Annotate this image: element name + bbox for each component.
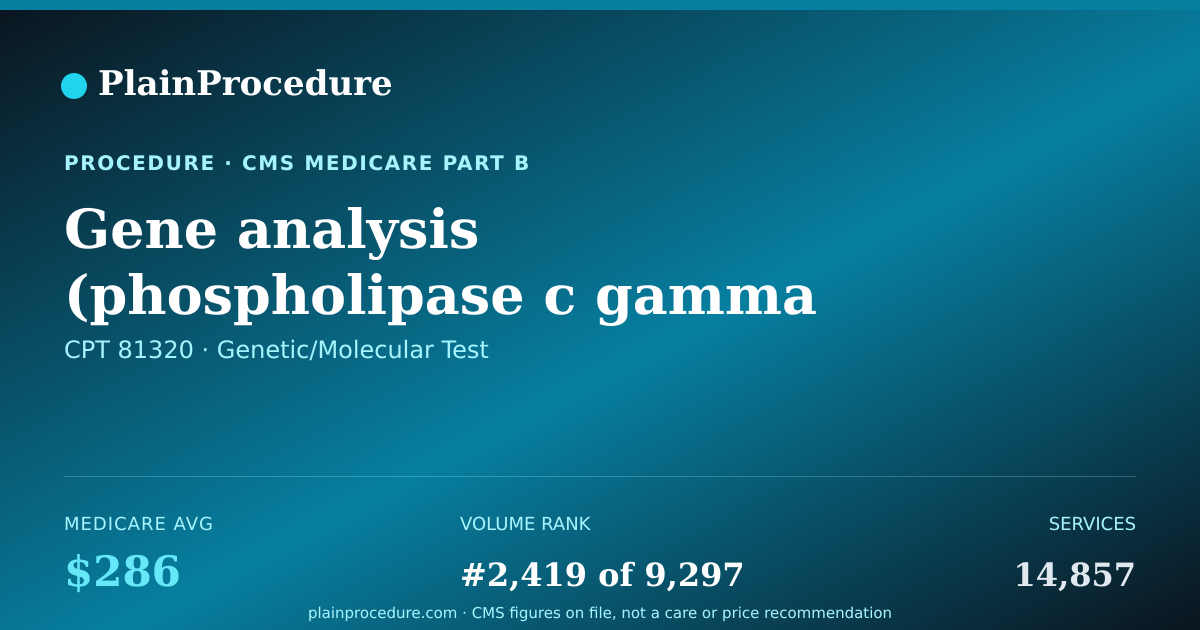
stat label: MEDICARE AVG — [64, 514, 214, 535]
stat: services — [1014, 514, 1136, 594]
stat: medicare average — [64, 514, 214, 596]
stat label: SERVICES — [1049, 514, 1136, 535]
title: (phospholipase c gamma — [64, 263, 817, 327]
stat: volume rank — [460, 514, 745, 594]
divider — [64, 476, 1136, 477]
top accent bar — [0, 0, 1200, 10]
footer note: plainprocedure.com · CMS figures on file, not a care or price recommendation — [308, 604, 892, 622]
title: Gene analysis — [64, 197, 479, 261]
stat value: #2,419 of 9,297 — [460, 556, 745, 594]
brand name: PlainProcedure — [98, 64, 393, 104]
stat value: $286 — [64, 547, 181, 596]
subtitle: CPT 81320 · Genetic/Molecular Test — [64, 336, 489, 364]
stat label: VOLUME RANK — [460, 514, 590, 535]
eyebrow label: PROCEDURE · CMS MEDICARE PART B — [64, 151, 531, 175]
title — [64, 197, 817, 327]
logo dot icon — [61, 73, 87, 99]
stat value: 14,857 — [1014, 556, 1136, 594]
